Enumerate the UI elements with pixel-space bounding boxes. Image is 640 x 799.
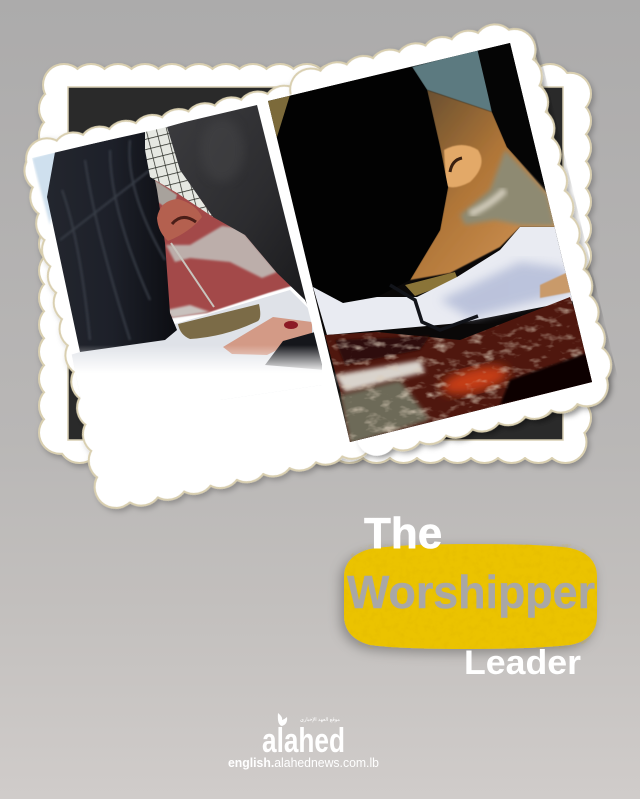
alahed logo: [228, 713, 379, 770]
face: [150, 175, 295, 318]
title: [347, 509, 595, 682]
turban: [47, 132, 177, 352]
right scalloped card: [263, 41, 595, 443]
beard: [166, 226, 277, 278]
ear: [444, 145, 482, 187]
black robe: [167, 105, 308, 306]
Arabic tagline: موقع العهد الإخباري: [300, 717, 340, 723]
website address: english.alahednews.com.lb: [228, 755, 379, 770]
left scalloped card: [43, 56, 587, 490]
prayer stone: [178, 304, 260, 339]
beard and hair: [460, 150, 555, 226]
back scalloped photo frame: [60, 85, 570, 442]
glasses: [171, 243, 214, 307]
keffiyeh scarf: [145, 127, 213, 217]
head and face: [410, 90, 560, 280]
sky corner: [32, 152, 57, 224]
plate texture: [344, 544, 597, 649]
prayer beads: [390, 285, 478, 330]
grey hair: [155, 180, 178, 206]
right photo: man prostrating on carpet: [260, 38, 605, 450]
teal cloth: [412, 48, 492, 112]
white cloth: [72, 290, 314, 370]
ear: [157, 199, 202, 241]
wordmark: alahed: [262, 722, 345, 760]
olive background: [268, 95, 293, 137]
prayer stone: [405, 272, 458, 296]
title word: Worshipper: Worshipper: [347, 566, 595, 618]
left photo: prostrating man: [32, 105, 322, 398]
right black robe: [478, 43, 545, 188]
bottom white fade: [72, 346, 322, 373]
yellow textured title plate: [344, 544, 597, 649]
title word: The: The: [364, 509, 442, 558]
black turban: [277, 67, 448, 303]
white prayer cloth: [313, 227, 578, 335]
hand edge: [540, 272, 572, 298]
hand with ring: [223, 317, 312, 355]
icon: flame: [278, 713, 287, 726]
carpet: [325, 297, 600, 445]
title word: Leader: Leader: [464, 644, 581, 682]
sleeve: [265, 332, 325, 370]
